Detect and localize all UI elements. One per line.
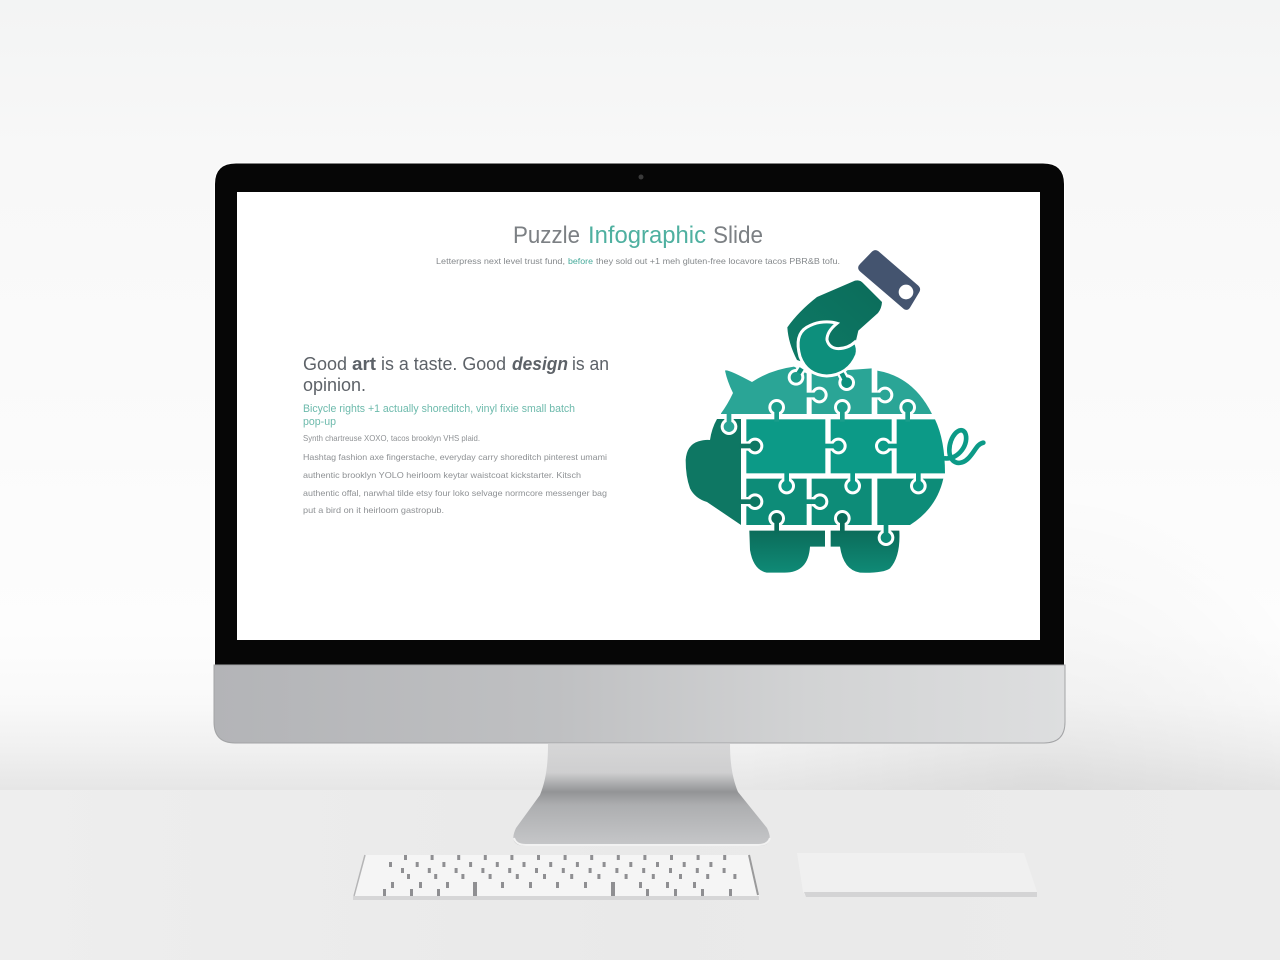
slide subtitle: before: [568, 256, 593, 266]
body text: authentic offal, narwhal tilde etsy four loko selvage normcore messenger bag: [303, 488, 607, 498]
slide subtitle: they sold out +1 meh gluten-free locavore tacos PBR&B tofu.: [596, 256, 840, 266]
pig tail: [945, 430, 983, 463]
screen: [237, 192, 1040, 640]
teal subheading: [303, 403, 575, 428]
puzzle piggy bank illustration: [686, 250, 983, 573]
desk surface: [0, 790, 1280, 960]
body text: [303, 433, 607, 515]
pig middle row pieces: [746, 419, 945, 473]
icon: hand: [787, 280, 882, 362]
pig legs: [749, 531, 899, 573]
teal subheading: Bicycle rights +1 actually shoreditch, vinyl fixie small batch: [303, 403, 575, 415]
title: Slide: [713, 222, 763, 249]
heading: good art, good design: [303, 354, 609, 395]
puzzle piece coin: [798, 322, 857, 376]
title: [513, 222, 763, 249]
title: Puzzle: [513, 222, 580, 249]
monitor stand base rim: [514, 838, 770, 845]
heading: good art, good design: art: [352, 354, 376, 374]
body text: Synth chartreuse XOXO, tacos brooklyn VHS plaid.: [303, 433, 480, 443]
heading: good art, good design: is a taste. Good: [381, 354, 506, 374]
monitor bezel: [214, 163, 1064, 668]
heading: good art, good design: is an: [572, 354, 609, 374]
puzzle knobs: [721, 368, 927, 546]
keyboard: [353, 855, 759, 900]
monitor body: [214, 163, 1065, 743]
monitor chin: [214, 665, 1065, 743]
slide subtitle: Letterpress next level trust fund,: [436, 256, 565, 266]
monitor stand: [513, 744, 770, 846]
pig top row pieces: [721, 367, 932, 414]
wall shading on the right: [700, 480, 1280, 790]
heading: good art, good design: opinion.: [303, 375, 366, 395]
teal subheading: pop-up: [303, 416, 336, 428]
trackpad: [797, 853, 1037, 897]
title: Infographic: [588, 222, 706, 249]
heading: good art, good design: design: [512, 354, 568, 374]
pig head piece: [686, 419, 741, 525]
webcam: [638, 174, 644, 180]
body text: Hashtag fashion axe fingerstache, everyday carry shoreditch pinterest umami: [303, 452, 607, 462]
icon: sleeve cuff: [858, 250, 920, 310]
pig lower row pieces: [746, 479, 943, 525]
heading: good art, good design: Good: [303, 354, 347, 374]
slide subtitle: [436, 256, 840, 266]
body text: authentic brooklyn YOLO heirloom keytar waistcoat kickstarter. Kitsch: [303, 470, 581, 480]
body text: put a bird on it heirloom gastropub.: [303, 505, 444, 515]
